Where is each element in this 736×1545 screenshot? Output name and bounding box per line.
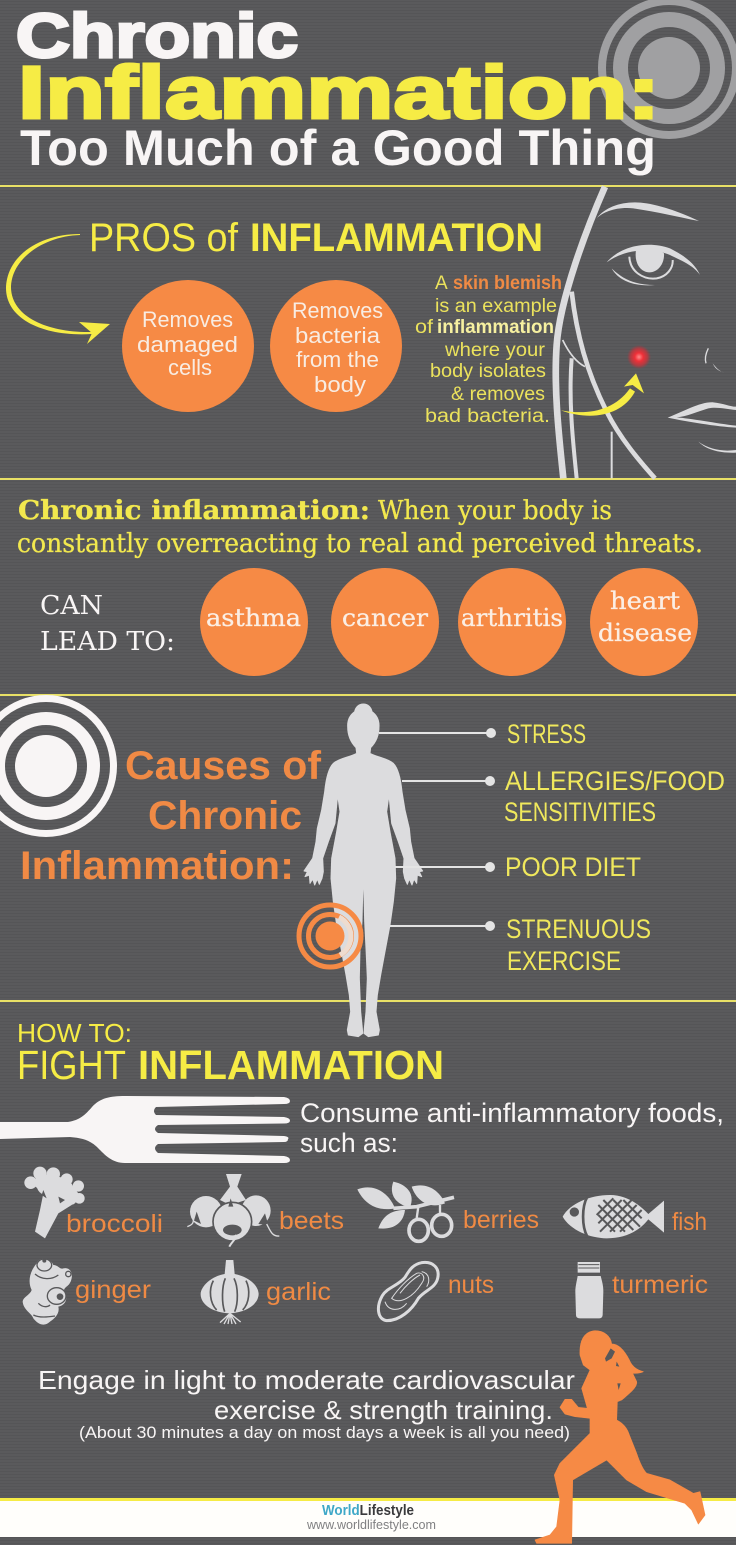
text block: skin blemish explanation: bad bacteria. bbox=[425, 406, 550, 427]
circle: removes bacteria from the body: Removes bbox=[292, 298, 383, 323]
icon: fish bbox=[563, 1195, 664, 1238]
food: nuts: nuts bbox=[448, 1271, 494, 1299]
text block: skin blemish explanation: where your bbox=[444, 340, 546, 361]
food: fish bbox=[563, 1195, 707, 1238]
heading: causes: Inflammation: bbox=[20, 844, 294, 888]
circle: arthritis: arthritis bbox=[461, 604, 563, 632]
icon: red blemish bbox=[627, 345, 651, 369]
panel: how to fight inflammation bbox=[0, 1018, 724, 1442]
heading: pros bbox=[89, 216, 543, 260]
panel: causes of chronic inflammation bbox=[0, 698, 725, 1037]
circle: asthma bbox=[200, 568, 308, 676]
text block: exercise advice bbox=[38, 1365, 575, 1442]
label: can lead to bbox=[40, 591, 175, 657]
food: garlic: garlic bbox=[266, 1278, 331, 1306]
icon: beets bbox=[187, 1174, 279, 1247]
food: turmeric bbox=[575, 1262, 708, 1318]
circle: heart disease: disease bbox=[598, 619, 692, 647]
text block: definition bbox=[17, 496, 703, 559]
url: www.worldlifestyle.com bbox=[306, 1517, 436, 1532]
circle: cancer: cancer bbox=[342, 604, 429, 632]
icon: orange target on thigh bbox=[299, 905, 361, 967]
text block: skin blemish explanation bbox=[415, 273, 562, 427]
text block: skin blemish explanation: A bbox=[435, 273, 448, 294]
icon: white concentric target bbox=[0, 698, 114, 834]
heading: causes: Causes of bbox=[125, 744, 322, 788]
icon: berries bbox=[357, 1182, 454, 1241]
illustration: face line art bbox=[556, 187, 736, 478]
text block: skin blemish explanation: skin blemish bbox=[453, 273, 562, 294]
panel: chronic inflammation definition bbox=[17, 496, 703, 676]
food: berries: berries bbox=[463, 1206, 539, 1234]
circle: removes damaged cells: Removes bbox=[142, 307, 233, 332]
food: beets bbox=[187, 1174, 344, 1247]
illustration: orange runner bbox=[535, 1331, 705, 1543]
food: broccoli: broccoli bbox=[66, 1210, 163, 1238]
list: causes: STRENUOUS bbox=[506, 914, 651, 944]
icon: grey concentric target bbox=[602, 1, 736, 135]
circle: asthma: asthma bbox=[206, 604, 301, 632]
icon: broccoli bbox=[24, 1167, 85, 1238]
food: nuts bbox=[378, 1262, 494, 1321]
title line: Chronic: Chronic bbox=[16, 2, 298, 71]
heading: causes: Chronic bbox=[148, 794, 302, 838]
icon: fork bbox=[0, 1096, 290, 1163]
list: causes: POOR DIET bbox=[505, 852, 641, 882]
arrow: curved to circles bbox=[6, 234, 110, 344]
circle: removes bacteria from the body: bacteria bbox=[295, 323, 381, 348]
text block: definition: Chronic inflammation: bbox=[18, 496, 370, 526]
food: garlic bbox=[201, 1260, 331, 1324]
circle: removes bacteria from the body bbox=[270, 280, 402, 412]
icon: ginger bbox=[23, 1259, 72, 1325]
leader: poor diet bbox=[395, 862, 495, 872]
list: causes: ALLERGIES/FOOD bbox=[505, 766, 725, 796]
circle: heart disease: heart bbox=[610, 587, 680, 615]
text: consume foods bbox=[300, 1098, 724, 1158]
brand: WorldLifestyle: WorldLifestyle bbox=[322, 1502, 414, 1519]
leader: allergies bbox=[402, 776, 495, 786]
icon: spice jar bbox=[575, 1262, 603, 1318]
label: can lead to: CAN bbox=[40, 591, 103, 621]
text block: skin blemish explanation: & removes bbox=[451, 384, 545, 405]
food: ginger bbox=[23, 1259, 151, 1325]
title line: Inflammation: Inflammation: bbox=[18, 51, 660, 134]
heading: how to: FIGHT bbox=[17, 1042, 126, 1088]
list: causes: STRESS bbox=[507, 719, 586, 749]
heading: causes bbox=[20, 744, 322, 888]
title bbox=[16, 2, 660, 176]
text block: exercise advice: (About 30 minutes a day on most days a week is all you need) bbox=[79, 1423, 570, 1442]
text block: skin blemish explanation: inflammation bbox=[437, 317, 554, 338]
leader: stress bbox=[379, 728, 496, 738]
label: can lead to: LEAD TO: bbox=[40, 627, 175, 657]
heading: how to bbox=[17, 1018, 444, 1088]
text block: skin blemish explanation: body isolates bbox=[430, 361, 546, 382]
circle: arthritis bbox=[458, 568, 566, 676]
circle: cancer bbox=[331, 568, 439, 676]
illustration: human body silhouette bbox=[304, 704, 423, 1037]
text: consume foods: such as: bbox=[300, 1128, 398, 1158]
food: broccoli bbox=[24, 1167, 163, 1238]
list: causes: EXERCISE bbox=[507, 946, 621, 976]
subtitle: Too Much of a Good Thing bbox=[20, 120, 656, 176]
panel: pros of inflammation bbox=[6, 187, 736, 478]
icon: garlic bbox=[201, 1260, 259, 1324]
food: berries bbox=[357, 1182, 539, 1241]
text block: exercise advice: Engage in light to moderate cardiovascular bbox=[38, 1365, 575, 1395]
list: causes: SENSITIVITIES bbox=[504, 797, 656, 827]
heading: how to: INFLAMMATION bbox=[138, 1042, 444, 1088]
circle: heart disease bbox=[590, 568, 698, 676]
text block: definition: When your body is bbox=[378, 496, 612, 526]
heading: pros: PROS of bbox=[89, 216, 239, 260]
leader: exercise bbox=[390, 921, 495, 931]
food: ginger: ginger bbox=[75, 1276, 151, 1304]
text block: exercise advice: exercise & strength training. bbox=[214, 1395, 553, 1425]
food: fish: fish bbox=[672, 1208, 707, 1236]
footer band bbox=[0, 1498, 736, 1537]
circle: removes bacteria from the body: body bbox=[314, 372, 366, 397]
icon: nuts bbox=[378, 1262, 438, 1321]
circle: removes damaged cells bbox=[122, 280, 254, 412]
text block: skin blemish explanation: is an example bbox=[435, 296, 557, 317]
food: turmeric: turmeric bbox=[612, 1271, 708, 1299]
circle: removes bacteria from the body: from the bbox=[296, 347, 379, 372]
arrow: to blemish bbox=[561, 373, 644, 416]
text block: definition: constantly overreacting to real and perceived threats. bbox=[17, 529, 703, 559]
food: beets: beets bbox=[279, 1207, 344, 1235]
list: causes bbox=[504, 719, 725, 976]
circle: removes damaged cells: cells bbox=[168, 355, 212, 380]
heading: pros: INFLAMMATION bbox=[250, 216, 543, 260]
text block: skin blemish explanation: of bbox=[415, 317, 434, 338]
heading: how to: HOW TO: bbox=[17, 1018, 132, 1048]
circle: removes damaged cells: damaged bbox=[137, 332, 238, 357]
text: consume foods: Consume anti-inflammatory foods, bbox=[300, 1098, 724, 1128]
